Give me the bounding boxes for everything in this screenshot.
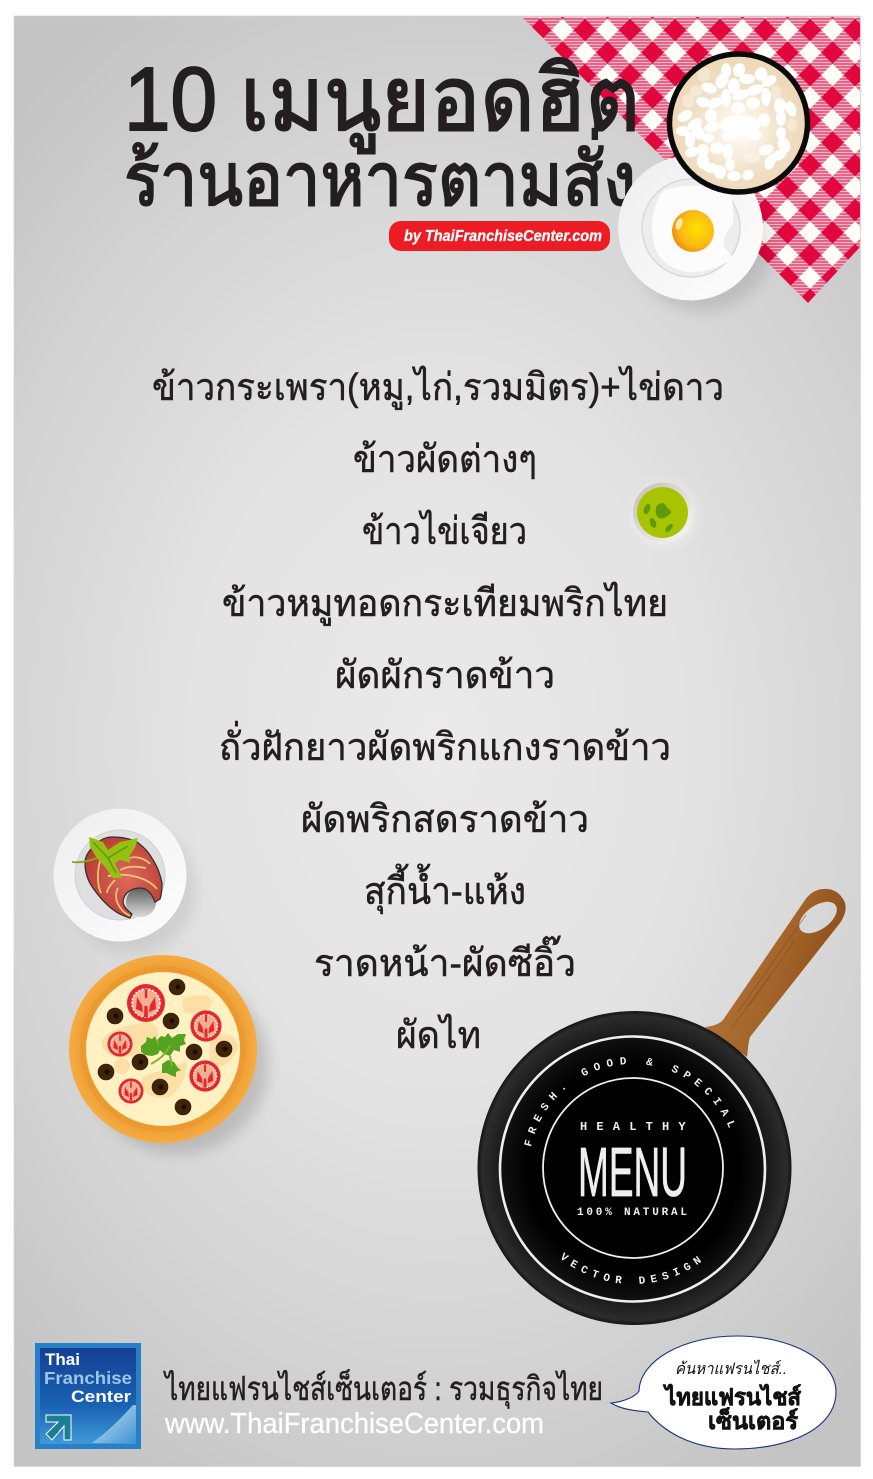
- footer text: ไทยแฟรนไชส์เซ็นเตอร์ : รวมธุรกิจไทย: [163, 1369, 603, 1409]
- badge text: HEALTHY: [580, 1120, 695, 1134]
- menu list: ข้าวหมูทอดกระเทียมพริกไทย: [222, 582, 668, 626]
- badge text: MENU: [578, 1133, 687, 1211]
- title: ร้านอาหารตามสั่ง: [124, 128, 636, 221]
- icon: frying pan with menu badge: [478, 888, 846, 1325]
- footer text: www.ThaiFranchiseCenter.com: [164, 1408, 544, 1440]
- pan body: [478, 1011, 792, 1325]
- menu list: สุกี้น้ำ-แห้ง: [364, 863, 526, 914]
- badge text: VECTOR DESIGN: [562, 1252, 702, 1284]
- icon: fish plate: [54, 808, 196, 953]
- title: 10 เมนูยอดฮิต: [124, 50, 640, 154]
- menu list: ข้าวผัดต่างๆ: [353, 439, 537, 481]
- menu list: ราดหน้า-ผัดซีอิ๊ว: [314, 936, 576, 985]
- footer text: [163, 1369, 603, 1440]
- icon: fried egg plate: [618, 156, 772, 312]
- logo: Thai Franchise Center: Center: [71, 1387, 131, 1406]
- title: [124, 50, 640, 221]
- inner ring: [543, 1078, 723, 1258]
- speech bubble: ไทยแฟรนไชส์: [662, 1383, 802, 1410]
- menu list: ผัดผักราดข้าว: [335, 655, 555, 697]
- speech bubble: เซ็นเตอร์: [708, 1406, 799, 1434]
- menu list: [152, 366, 724, 1057]
- icon: rice bowl: [670, 54, 808, 192]
- speech bubble: ค้นหาแฟรนไชส์..: [675, 1359, 787, 1378]
- speech bubble: [611, 1336, 836, 1449]
- menu list: ผัดพริกสดราดข้าว: [301, 799, 589, 841]
- menu list: ถั่วฝักยาวผัดพริกแกงราดข้าว: [219, 721, 671, 769]
- pan inner surface: [501, 1036, 765, 1300]
- menu list: ข้าวกระเพรา(หมู,ไก่,รวมมิตร)+ไข่ดาว: [152, 366, 724, 410]
- badge text: [524, 1057, 734, 1284]
- pan handle: [705, 889, 846, 1057]
- logo: Thai Franchise Center: [35, 1343, 141, 1449]
- checkered tablecloth: [522, 17, 860, 303]
- logo: Thai Franchise Center: Thai: [45, 1350, 80, 1369]
- icon: pizza: [69, 955, 268, 1154]
- logo: Thai Franchise Center: Franchise: [44, 1368, 132, 1388]
- byline badge: [389, 221, 610, 251]
- outer ring: [500, 1036, 765, 1302]
- badge text: FRESH. GOOD & SPECIAL: [524, 1057, 734, 1146]
- icon: green sauce bowl: [633, 482, 695, 545]
- menu list: ผัดไท: [396, 1014, 481, 1057]
- byline badge: by ThaiFranchiseCenter.com: [404, 228, 602, 245]
- menu list: ข้าวไข่เจียว: [362, 510, 527, 553]
- badge text: 100% NATURAL: [577, 1207, 690, 1219]
